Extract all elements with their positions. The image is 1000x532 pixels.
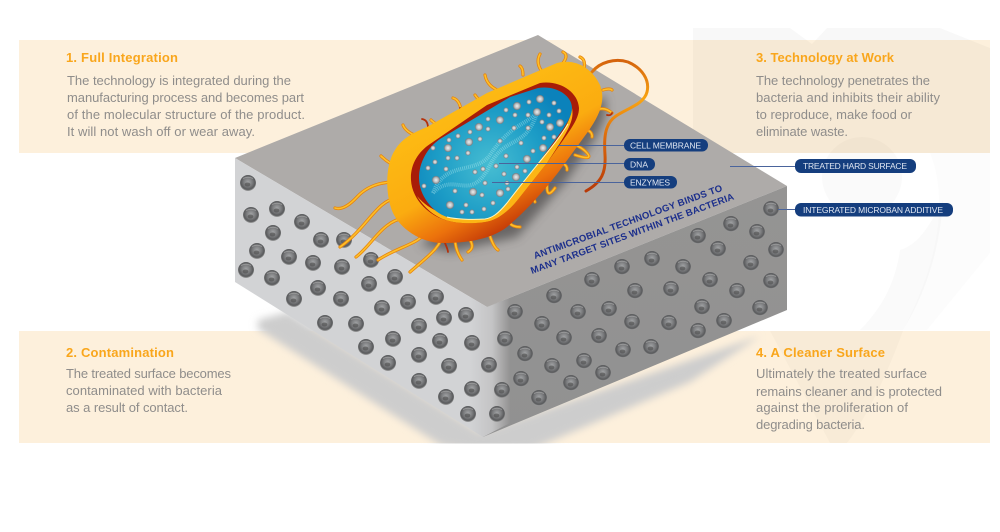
lower membrane band [417,108,573,223]
bacterium [335,52,648,272]
block right face [483,186,787,437]
panel: top band [19,40,990,153]
text: 1. Full Integration: of the molecular structure of the product. [67,107,305,122]
treated surface block [235,35,787,437]
bacterium shadow [420,95,606,252]
label: cell membrane [624,139,708,152]
label: DNA [624,158,655,170]
text: 1. Full Integration: The technology is integrated during the [67,73,291,88]
membrane highlight [447,124,568,219]
block top face [235,35,787,307]
label: DNA: DNA [630,159,648,169]
text: 2. Contamination: as a result of contact. [66,400,188,415]
label: treated hard surface [795,159,916,173]
label: enzymes: ENZYMES [630,177,670,187]
label: cell membrane: CELL MEMBRANE [630,140,701,150]
panel: bottom band [19,331,990,443]
text: 1. Full Integration: 1. Full Integration [66,50,178,65]
text: 2. Contamination: The treated surface becomes [66,366,232,381]
text: 1. Full Integration: manufacturing process and becomes part [67,90,304,105]
block left face [235,158,487,437]
angled caption on block: ANTIMICROBIAL TECHNOLOGY BINDS TO [532,183,724,262]
DNA helix [433,113,537,193]
text: 4. A Cleaner Surface: remains cleaner and is protected [756,384,942,399]
embedded additive spheres: left face [238,175,480,422]
text: 2. Contamination [66,345,232,415]
text: 3. Technology at Work: 3. Technology at Work [756,50,895,65]
cell wall [387,62,602,243]
text: 1. Full Integration [66,50,305,139]
text: 3. Technology at Work: bacteria and inhibits their ability [756,90,940,105]
angled caption on block: MANY TARGET SITES WITHIN THE BACTERIA [529,192,736,277]
text: 2. Contamination: 2. Contamination [66,345,174,360]
enzyme droplets [422,95,564,214]
label: integrated microban additive: INTEGRATED MICROBAN ADDITIVE [803,205,943,215]
block shadow [258,312,760,452]
text: 4. A Cleaner Surface [756,345,942,432]
label: enzymes [624,176,677,188]
inner rim [411,83,579,223]
text: 4. A Cleaner Surface: against the proliferation of [756,400,908,415]
text: 3. Technology at Work: eliminate waste. [756,124,848,139]
text: 4. A Cleaner Surface: degrading bacteria. [756,417,865,432]
block front corner [470,297,510,437]
text: 4. A Cleaner Surface: Ultimately the treated surface [756,366,927,381]
flagellum tail [586,60,648,191]
leader lines [492,146,795,210]
label: treated hard surface: TREATED HARD SURFACE [803,161,907,171]
text: 2. Contamination: contaminated with bacteria [66,383,223,398]
label: integrated microban additive [795,203,953,216]
text: 3. Technology at Work: The technology penetrates the [756,73,930,88]
embedded additive spheres: right face [481,201,784,422]
watermark swirl [693,28,990,443]
text: 3. Technology at Work: to reproduce, make food or [756,107,913,122]
text: 3. Technology at Work [756,50,940,139]
pili [335,52,612,272]
cell membrane cytoplasm [419,87,572,219]
text: 1. Full Integration: It will not wash off or wear away. [67,124,255,139]
text: 4. A Cleaner Surface: 4. A Cleaner Surface [756,345,885,360]
